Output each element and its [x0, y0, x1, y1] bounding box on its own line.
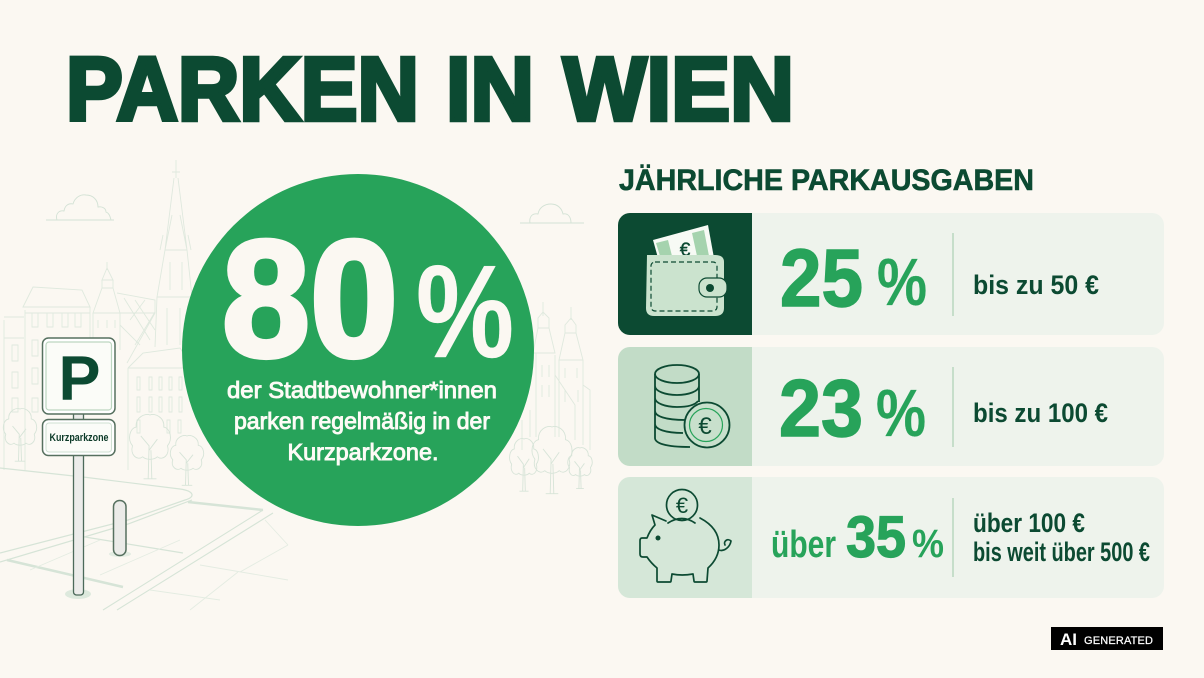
icon panel: wallet: € — [680, 240, 691, 261]
P panel: P — [58, 344, 101, 414]
bollard — [109, 500, 131, 557]
value over 35 percent — [771, 505, 944, 570]
parking sign — [42, 338, 131, 599]
icon panel: piggy bank — [618, 477, 752, 598]
title: IN — [446, 40, 534, 140]
row 3 — [618, 477, 1164, 598]
left palais — [4, 287, 90, 470]
row 2 — [618, 347, 1164, 466]
circle caption — [227, 377, 497, 465]
value 25 percent — [780, 233, 927, 324]
title — [66, 40, 794, 140]
80 percent: 80 — [222, 207, 398, 392]
icon panel: coins — [618, 347, 752, 466]
icon panel: coins: € — [698, 413, 712, 440]
value over 35 percent: 35 — [846, 505, 906, 570]
value 23 percent: 23 — [779, 364, 863, 454]
main statistic circle — [182, 174, 534, 526]
trees — [3, 409, 592, 494]
value 25 percent: % — [877, 245, 927, 320]
street and pavement — [0, 468, 288, 610]
small tower and patterned roof — [93, 262, 155, 363]
right towers — [522, 302, 590, 450]
cloud left — [46, 195, 114, 220]
Kurzparkzone panel: Kurzparkzone — [50, 432, 108, 444]
title: PARKEN — [66, 40, 419, 140]
value 23 percent: % — [876, 376, 926, 451]
circle caption: parken regelmäßig in der — [234, 408, 490, 434]
badge: AI generated — [1051, 627, 1163, 650]
icon panel: wallet — [618, 213, 752, 335]
illustration: Vienna skyline — [0, 160, 592, 610]
cloud right — [520, 204, 584, 223]
value over 35 percent: über — [771, 524, 836, 566]
front building — [128, 348, 188, 470]
P panel — [42, 338, 115, 414]
value 23 percent — [779, 364, 926, 454]
label up to 100 euro: bis zu 100 € — [973, 398, 1108, 428]
Kurzparkzone panel — [42, 420, 115, 456]
label over 100 to over 500 euro — [973, 508, 1150, 567]
label up to 50 euro: bis zu 50 € — [973, 270, 1099, 300]
circle caption: Kurzparkzone. — [288, 439, 438, 465]
value 25 percent: 25 — [780, 233, 863, 324]
heading: annual parking costs: JÄHRLICHE PARKAUSGABEN — [619, 164, 1034, 197]
badge: AI generated: GENERATED — [1084, 635, 1153, 647]
row 1 — [618, 213, 1164, 335]
cathedral — [155, 160, 192, 347]
label over 100 to over 500 euro: über 100 € — [973, 508, 1085, 538]
80 percent — [222, 207, 514, 392]
sign post — [65, 408, 91, 599]
title: WIEN — [563, 40, 794, 140]
circle caption: der Stadtbewohner*innen — [227, 377, 497, 403]
value over 35 percent: % — [912, 522, 944, 566]
icon panel: piggy bank: € — [676, 493, 688, 518]
80 percent: % — [416, 238, 514, 385]
badge: AI generated: AI — [1060, 630, 1077, 649]
